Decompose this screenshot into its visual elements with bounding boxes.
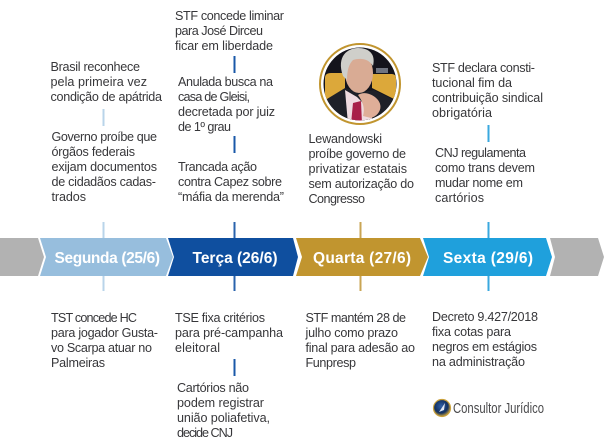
text: Lewandowski: Congresso (308, 192, 365, 206)
text: Brasil apátrida (50, 60, 162, 104)
text: CNJ trans: como trans devem (435, 161, 535, 175)
text: Funpresp: julho como prazo (304, 326, 398, 340)
text: Brasil apátrida: pela primeira vez (50, 75, 147, 89)
text: contribuição sindical: STF declara consti- (432, 61, 535, 75)
text: Gustavo Scarpa: Palmeiras (51, 356, 105, 370)
text: Gustavo Scarpa: para jogador Gusta- (51, 326, 158, 340)
text: Gleisi: decretada por juiz (178, 105, 275, 119)
text: Governo documentos: Governo proíbe que (52, 130, 157, 144)
chevron: start grey (0, 238, 44, 276)
chevron: Sexta: Sexta (29/6) (443, 250, 533, 267)
connector lines (102, 56, 490, 376)
text: decreto cotas: fixa cotas para (432, 325, 511, 339)
chevron: Terça: Terça (26/6) (192, 250, 278, 267)
text: Gustavo Scarpa (51, 311, 158, 370)
text: união poliafetiva: decide CNJ (177, 426, 233, 440)
text: Governo documentos: de cidadãos cadas- (52, 175, 156, 189)
text: união poliafetiva: Cartórios não (177, 381, 249, 395)
text: Funpresp: Funpresp (306, 356, 356, 370)
text: Brasil apátrida: condição de apátrida (50, 90, 162, 104)
text: José Dirceu (175, 9, 284, 53)
text: TSE pré-campanha: para pré-campanha (175, 326, 283, 340)
logo: Consultor Jurídico: Consultor Jurídico (453, 401, 544, 417)
chevron: Segunda: Segunda (25/6) (54, 250, 160, 267)
text: Capez: Trancada ação (178, 160, 257, 174)
text: Capez: contra Capez sobre (178, 175, 282, 189)
text: CNJ trans (435, 146, 535, 205)
portrait: Lewandowski (320, 44, 400, 126)
text: Gleisi: de 1º grau (178, 120, 231, 134)
text: Governo documentos: trados (52, 190, 86, 204)
text: Gleisi: Anulada busca na (178, 75, 273, 89)
text: união poliafetiva (177, 381, 270, 440)
text: Gustavo Scarpa: vo Scarpa atuar no (51, 341, 152, 355)
text: Lewandowski: privatizar estatais (308, 162, 407, 176)
text: Funpresp: final para adesão ao (306, 341, 415, 355)
text: Lewandowski: sem autorização do (308, 177, 414, 191)
logo: Consultor Jurídico (434, 400, 544, 417)
text: Governo documentos: exijam documentos (52, 160, 157, 174)
text: união poliafetiva: união poliafetiva, (177, 411, 270, 425)
text: José Dirceu: ficar em liberdade (175, 39, 273, 53)
text: união poliafetiva: podem registrar (177, 396, 264, 410)
text: TSE pré-campanha: TSE fixa critérios (175, 311, 265, 325)
chevron: end grey (550, 238, 604, 276)
text: decreto cotas: na administração (432, 355, 525, 369)
text: contribuição sindical: tucional fim da (432, 76, 512, 90)
text: José Dirceu: STF concede liminar (175, 9, 284, 23)
text: Gleisi (178, 75, 275, 134)
text: CNJ trans: cartórios (435, 191, 484, 205)
text: contribuição sindical: obrigatória (432, 106, 492, 120)
text: Capez (178, 160, 284, 204)
text: Funpresp (304, 311, 415, 370)
text: TSE pré-campanha: eleitoral (175, 341, 220, 355)
text: Gustavo Scarpa: TST concede HC (51, 311, 137, 325)
chevron: Terça (168, 238, 298, 276)
chevron: Quarta: Quarta (27/6) (313, 250, 411, 267)
chevron: Segunda (40, 238, 173, 276)
text: decreto cotas (432, 310, 538, 369)
text: TSE pré-campanha (175, 311, 283, 355)
chevron: Sexta (423, 238, 552, 276)
text: CNJ trans: mudar nome em (435, 176, 523, 190)
text: Lewandowski (308, 132, 414, 206)
text: Lewandowski: Lewandowski (308, 132, 382, 146)
text: decreto cotas: negros em estágios (432, 340, 537, 354)
chevron: Quarta (296, 238, 428, 276)
text: Brasil apátrida: Brasil reconhece (50, 60, 140, 74)
text: José Dirceu: para José Dirceu (175, 24, 263, 38)
text: contribuição sindical (432, 61, 543, 120)
text: CNJ trans: CNJ regulamenta (435, 146, 526, 160)
text: Capez: “máfia da merenda” (178, 190, 284, 204)
text: contribuição sindical: contribuição sindical (432, 91, 543, 105)
text: Lewandowski: proíbe governo de (308, 147, 406, 161)
text: decreto cotas: Decreto 9.427/2018 (432, 310, 538, 324)
text: Governo documentos (52, 130, 157, 204)
text: Governo documentos: órgãos federais (52, 145, 135, 159)
text: Gleisi: casa de Gleisi, (178, 90, 250, 104)
text: Funpresp: STF mantém 28 de (306, 311, 406, 325)
